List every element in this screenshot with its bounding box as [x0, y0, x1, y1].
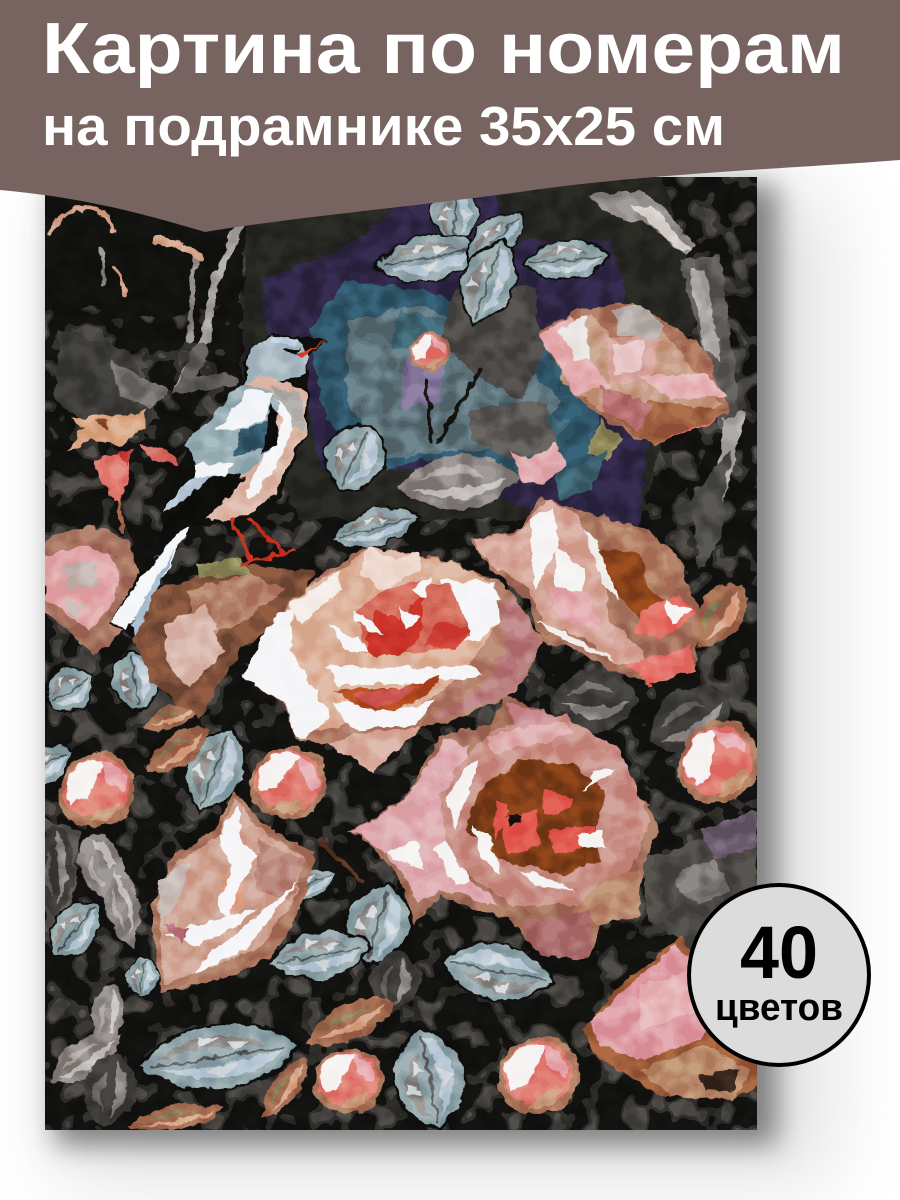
rose: lower left — [152, 790, 315, 993]
bird — [110, 332, 328, 637]
paint-by-number colour blotches — [45, 177, 757, 1130]
painting: roses and bird — [8, 170, 771, 1139]
blue-grey leaves group — [8, 187, 760, 1139]
canvas shadow — [55, 185, 830, 1180]
title: Картина по номерам — [42, 9, 845, 89]
rose: second large — [470, 498, 700, 685]
rose: lower right partly under badge — [582, 938, 757, 1100]
moonlit sky patch — [262, 190, 650, 525]
badge label: цветов — [715, 987, 843, 1029]
title banner — [0, 0, 900, 232]
pink bud and olive leaf — [510, 420, 622, 500]
badge number: 40 — [740, 911, 818, 994]
autumn leaves — [68, 410, 180, 505]
brown leaf under bird — [130, 558, 315, 720]
dark background foliage — [45, 170, 757, 960]
stem sketches — [50, 209, 480, 880]
rose: top right — [538, 303, 730, 445]
rose: left — [45, 525, 145, 655]
small rosebuds — [59, 333, 771, 1113]
rose: main central — [242, 547, 543, 773]
painted grey foliage texture — [45, 177, 757, 1130]
subtitle: на подрамнике 35х25 см — [42, 95, 725, 157]
badge: 40 colours — [689, 885, 869, 1065]
rose: third large — [350, 695, 660, 960]
